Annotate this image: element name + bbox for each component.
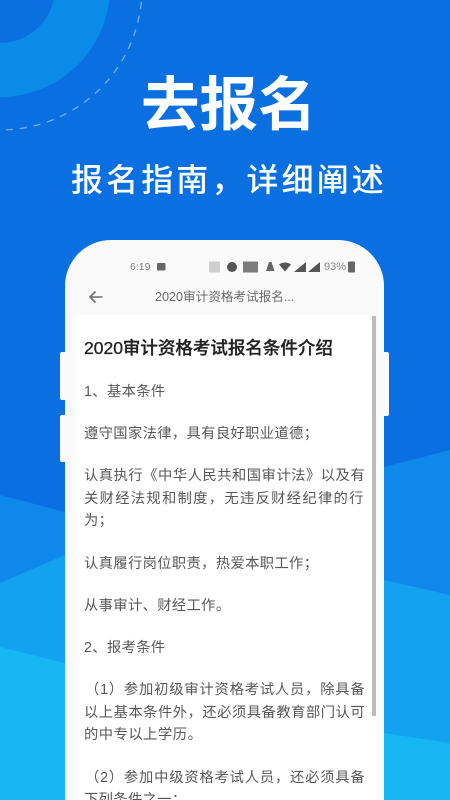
back arrow [89,290,102,304]
article body text: 2、报考条件 [84,640,166,656]
article body text: （2）参加中级资格考试人员，还必须具备 [85,770,366,786]
phone side buttons [60,352,389,462]
article body text: 为； [84,513,113,529]
article heading: 2020审计资格考试报名条件介绍 [84,338,333,358]
status icons [157,262,355,272]
article body text: 认真履行岗位职责，热爱本职工作； [84,556,318,572]
article body text: 的中专以上学历。 [84,727,202,743]
clock time: 6:19 [130,261,150,273]
article body text: 以上基本条件外，还必须具备教育部门认可 [84,705,365,721]
phone mockup [60,240,389,800]
article body text: （1）参加初级审计资格考试人员，除具备 [85,682,366,698]
phone body [65,240,384,800]
toolbar title: 2020审计资格考试报名... [155,290,294,304]
article body text: 1、基本条件 [84,384,166,400]
article body text: 认真执行《中华人民共和国审计法》以及有 [84,468,365,484]
subtitle: 报名指南，详细阐述 [71,162,387,198]
battery percent: 93% [324,261,346,273]
article body text: 关财经法规和制度，无违反财经纪律的行 [84,491,365,507]
article body text: 从事审计、财经工作。 [84,598,230,614]
title: 去报名 [141,73,317,138]
content panel [77,315,376,800]
status bar [130,261,355,273]
scrollbar [372,316,376,716]
article body text: 遵守国家法律，具有良好职业道德； [84,426,318,442]
article body text [84,384,366,800]
